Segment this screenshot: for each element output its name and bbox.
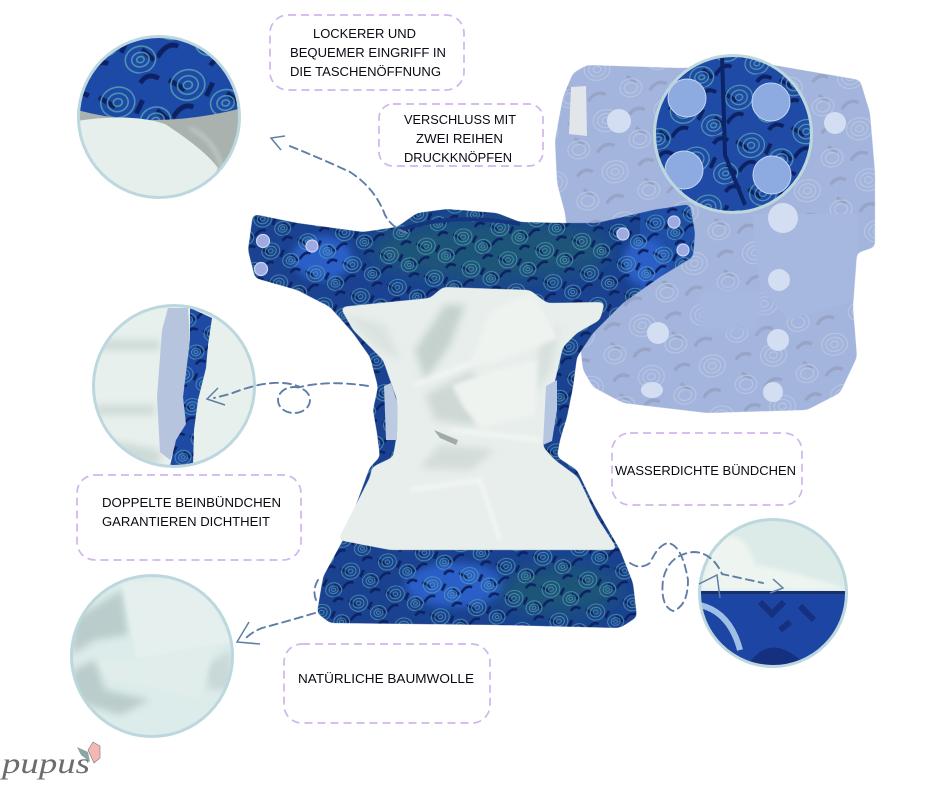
callout: pocket opening: LOCKERER UND [313,26,416,41]
arrow: to pocket opening [271,136,407,233]
logo: pupus with butterfly: pupus [0,747,90,780]
callout: double leg gussets: DOPPELTE BEINBÜNDCHEN [102,495,281,510]
callout: snap closure: DRUCKKNÖPFEN [404,150,512,165]
detail circle: waterproof cuff [695,515,850,672]
detail circle: double leg gusset [90,300,260,475]
arrow: to natural cotton [237,580,318,644]
icon: leg gusset left [384,383,397,440]
logo: pupus with butterfly [0,742,100,780]
arrow: to leg gusset [207,383,368,413]
icon: leg gusset right [543,380,557,445]
callout: double leg gussets [77,475,301,560]
callout: pocket opening: BEQUEMER EINGRIFF IN [290,45,446,60]
illustration: open diaper inside view [240,200,700,640]
callout: snap closure: ZWEI REIHEN [416,131,503,146]
icon: snap buttons on waist [254,216,689,276]
callout: natural cotton: NATÜRLICHE BAUMWOLLE [298,671,474,686]
callout: waterproof cuffs [612,433,802,505]
callout: natural cotton [284,644,490,723]
detail circle: natural cotton [70,570,235,740]
callout: snap closure: VERSCHLUSS MIT [404,112,516,127]
callout: double leg gussets: GARANTIEREN DICHTHEIT [102,514,270,529]
panel: faded outside view of diaper [550,60,880,420]
callout: pocket opening: DIE TASCHENÖFFNUNG [290,64,441,79]
callout: snap closure [379,104,543,166]
callout: pocket opening [270,15,464,90]
detail circle: pocket opening [77,35,241,199]
arrow: to waterproof cuff [630,543,783,611]
panel: white cotton inner lining [340,287,616,550]
callout: waterproof cuffs: WASSERDICHTE BÜNDCHEN [615,463,796,478]
detail circle: two rows of snaps [653,54,813,214]
